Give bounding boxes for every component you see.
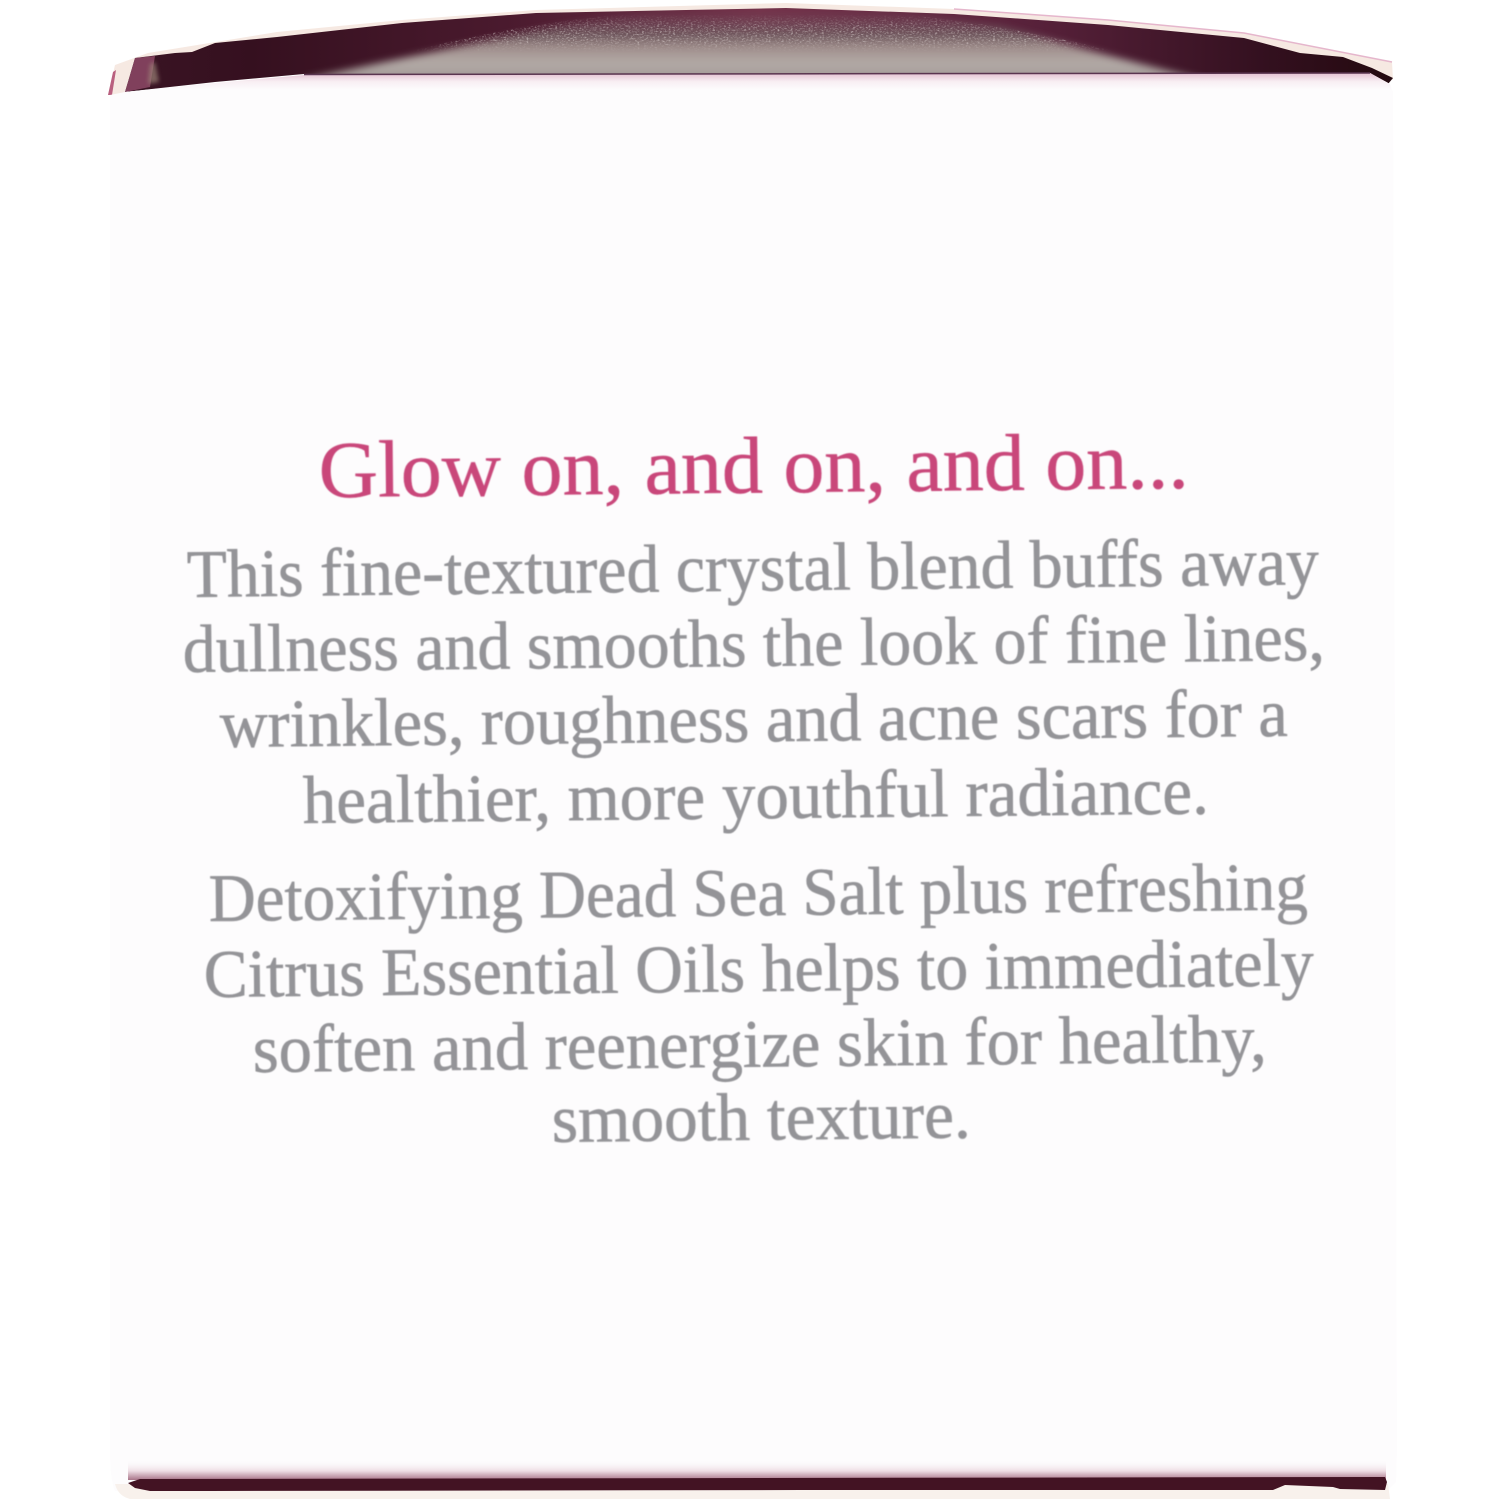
paragraph: crystal blend: wrinkles, roughness and acne scars for a bbox=[219, 675, 1288, 762]
heading: Glow on, and on, and on... bbox=[318, 418, 1189, 515]
box bottom edge bbox=[115, 1460, 1390, 1499]
box top flap edge bbox=[108, 3, 1393, 95]
paragraph: crystal blend: dullness and smooths the look of fine lines, bbox=[182, 599, 1325, 687]
paragraph: dead sea salt bbox=[203, 848, 1314, 1157]
paragraph: crystal blend: This fine-textured crystal blend buffs away bbox=[186, 523, 1319, 612]
paragraph: crystal blend bbox=[182, 523, 1325, 838]
paragraph: crystal blend: healthier, more youthful radiance. bbox=[302, 753, 1209, 838]
box inner opening bbox=[125, 8, 1393, 92]
paragraph: dead sea salt: smooth texture. bbox=[551, 1077, 971, 1157]
paragraph: dead sea salt: Citrus Essential Oils helps to immediately bbox=[203, 924, 1314, 1012]
paragraph: dead sea salt: Detoxifying Dead Sea Salt plus refreshing bbox=[208, 848, 1308, 936]
paragraph: dead sea salt: soften and reenergize skin for healthy, bbox=[252, 1000, 1267, 1087]
